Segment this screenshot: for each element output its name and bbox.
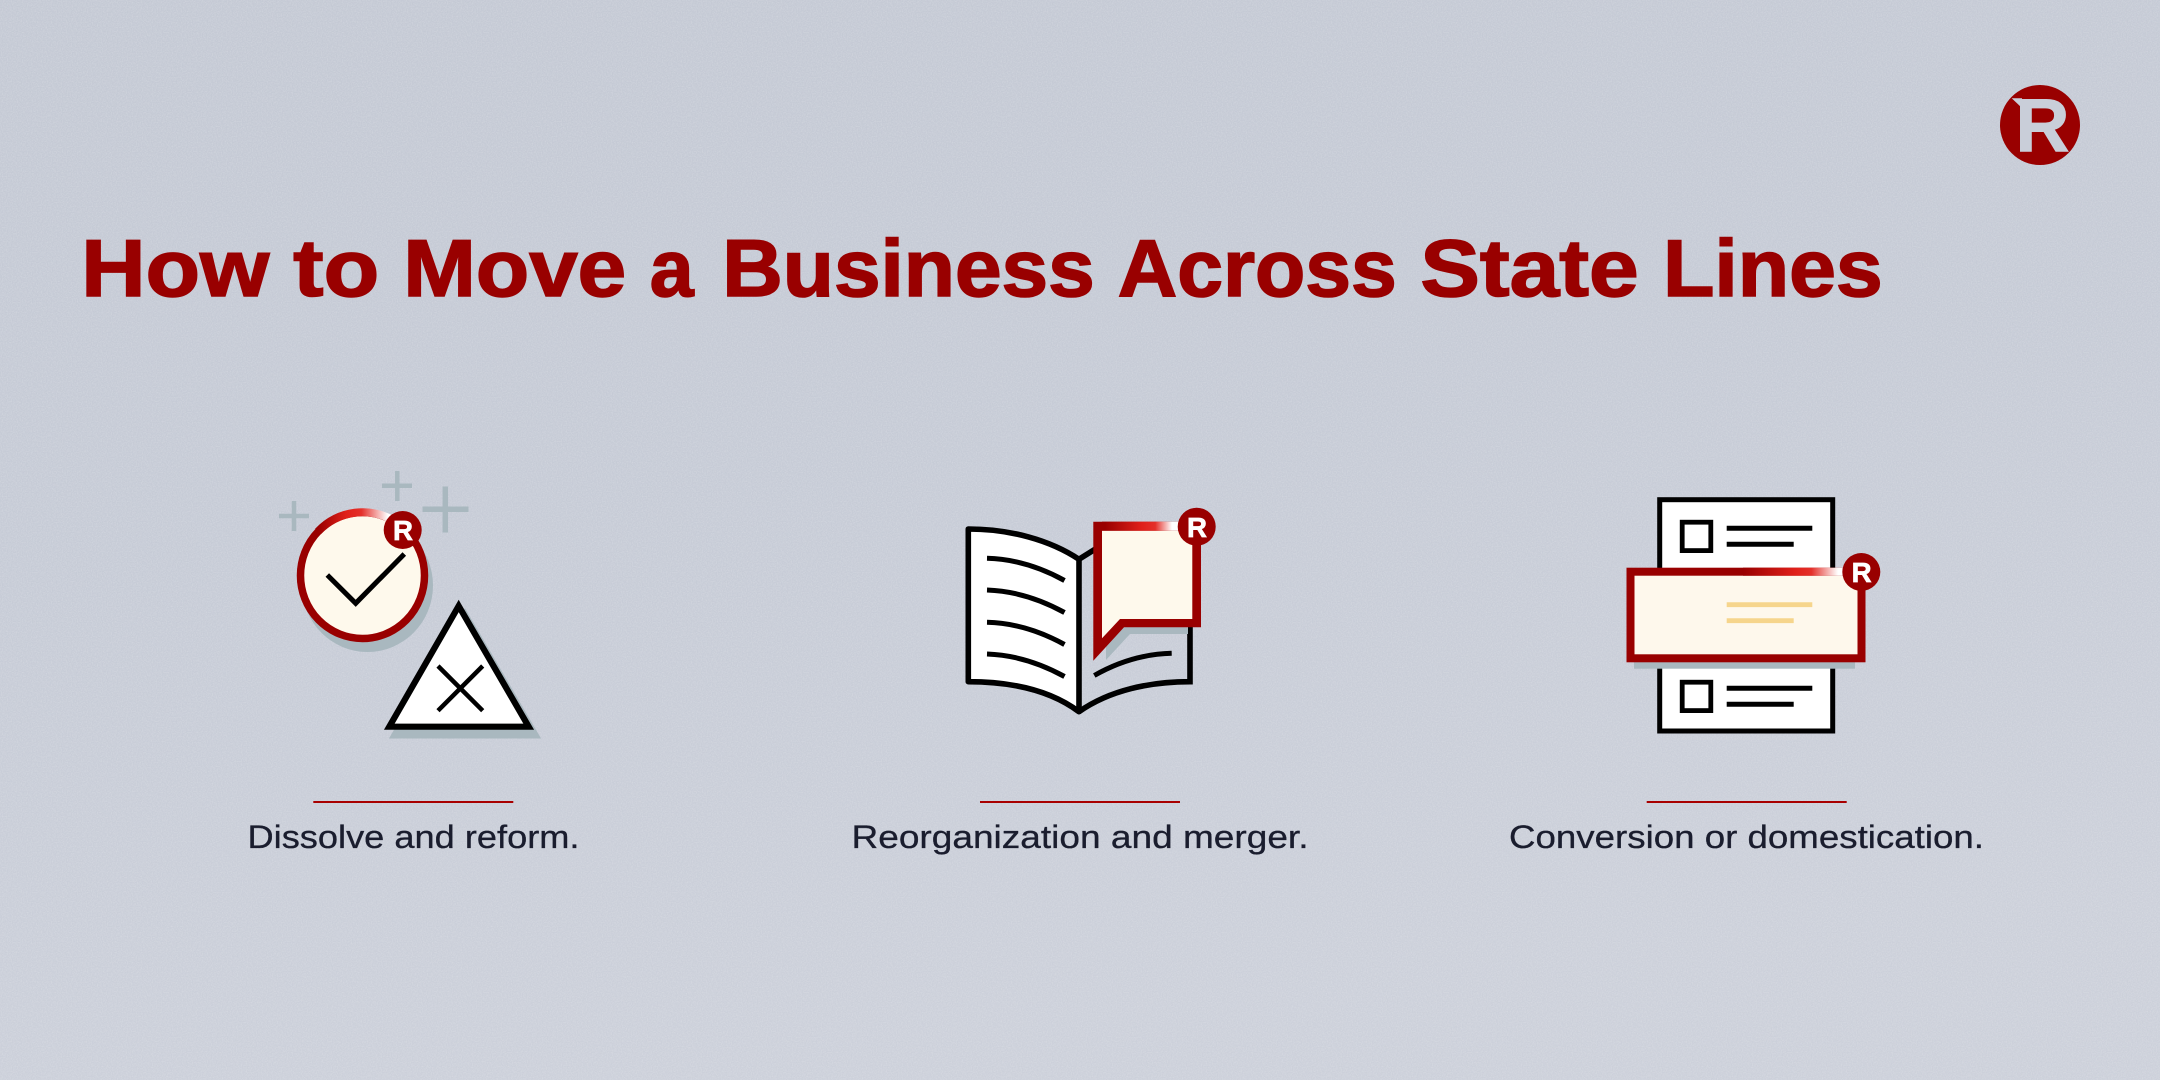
title: Move <box>403 224 626 314</box>
divider: first column <box>313 801 513 803</box>
title: Lines <box>1663 224 1883 314</box>
icon: document with highlighted row <box>1630 500 1880 731</box>
icon: book <box>968 529 1190 712</box>
icon: highlight band <box>1630 553 1880 669</box>
icon: open book with speech bubble <box>968 508 1216 712</box>
label: reorganization and merger: Reorganization and merger. <box>852 818 1308 855</box>
logo: R circle: R <box>2016 83 2070 167</box>
title: Across <box>1118 224 1397 314</box>
divider: third column <box>1647 801 1847 803</box>
title: State <box>1420 224 1639 314</box>
icon: speech bubble <box>1093 508 1216 661</box>
label: dissolve and reform: Dissolve and reform. <box>248 818 580 855</box>
icon: circle with checkmark <box>300 511 433 652</box>
icon: check circle and x triangle <box>279 471 535 735</box>
icon: decorative plus signs <box>279 471 468 532</box>
icon: circle with checkmark: R <box>393 515 413 546</box>
logo: R circle <box>2000 83 2080 167</box>
title: a <box>650 224 695 314</box>
icon: speech bubble: R <box>1187 512 1207 543</box>
title: How <box>81 224 270 314</box>
divider: second column <box>980 801 1180 803</box>
icon: triangle with x <box>389 606 535 735</box>
label: conversion or domestication: Conversion or domestication. <box>1509 818 1984 855</box>
icon: highlight band: R <box>1852 557 1872 588</box>
title: to <box>293 224 379 314</box>
icon: document <box>1660 500 1833 731</box>
title: Business <box>722 224 1095 314</box>
